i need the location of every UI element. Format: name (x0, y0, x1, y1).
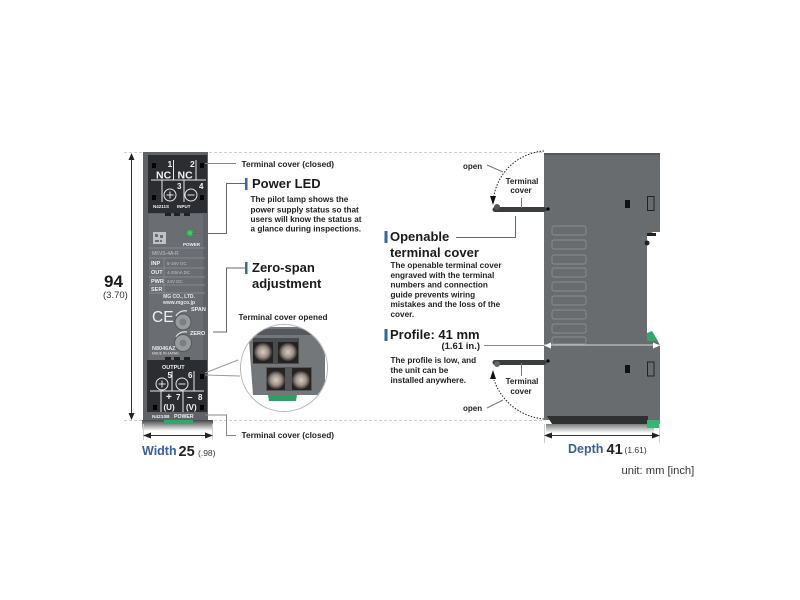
span and zero dials (152, 307, 206, 356)
shadow below front device (142, 420, 213, 431)
profile text: the unit can be (390, 366, 449, 375)
upper terminal cover: INPUT (177, 204, 191, 209)
lower terminal cover: 5 (168, 371, 172, 380)
lower terminal cover: – (187, 392, 193, 403)
lower terminal cover (147, 360, 207, 420)
terminal cover closed top callout: Terminal cover (closed) (242, 159, 334, 169)
lower terminal cover: OUTPUT (162, 365, 185, 371)
rating label: MG CO., LTD. (163, 294, 196, 300)
green clips (647, 331, 658, 341)
upper terminal cover: NC (156, 170, 172, 182)
height dimension: 94 (104, 272, 123, 291)
width dimension: (.98) (198, 448, 216, 458)
upper open cover arm (463, 151, 544, 210)
side latches (625, 196, 656, 376)
openable terminal cover text: cover. (390, 310, 414, 319)
upper terminal cover: 2 (190, 159, 195, 169)
side view device (544, 153, 660, 433)
lower terminal cover: (V) (186, 403, 197, 412)
profile text: (1.61 in.) (441, 341, 480, 352)
zero-span adjustment callout: Zero-span (252, 260, 315, 275)
profile text: installed anywhere. (390, 376, 466, 385)
rating label: 24V DC (167, 279, 184, 284)
upper terminal cover: 1 (168, 159, 172, 169)
depth dimension (544, 424, 660, 458)
terminal cover opened inset: Terminal cover opened (238, 313, 328, 322)
lower terminal cover: 7 (176, 393, 181, 402)
depth dimension: Depth (568, 442, 603, 456)
power LED (183, 228, 201, 247)
rating label: 5-16V DC (167, 261, 188, 266)
upper open cover arm: Terminal (506, 177, 538, 186)
width dimension: Width (142, 444, 177, 458)
side body (544, 153, 660, 420)
openable terminal cover text: numbers and connection (390, 280, 488, 290)
lower terminal cover: 8 (198, 393, 203, 402)
rating label: 4-20mA DC (167, 270, 191, 275)
power LED callout: power supply status so that (250, 206, 359, 214)
depth dimension: (1.61) (624, 445, 647, 455)
terminal cover closed bottom callout: Terminal cover (closed) (242, 430, 334, 440)
dashed extension lines (124, 152, 544, 420)
width dimension: 25 (178, 444, 195, 460)
upper terminal cover (148, 155, 207, 213)
lower terminal cover: (U) (164, 403, 175, 412)
rating label: OUT (151, 270, 163, 276)
openable terminal cover text: guide prevents wiring (390, 290, 475, 300)
profile text: Profile: 41 mm (390, 327, 480, 342)
rating label: M6VS-4A-R (152, 251, 179, 257)
zero-span adjustment callout (213, 260, 322, 332)
lower terminal cover: 6 (188, 371, 193, 380)
lower terminal cover: N4210B (152, 414, 170, 420)
power LED callout: users will know the status at (250, 215, 362, 224)
rating label: SER (151, 287, 162, 293)
upper open cover arm: cover (510, 186, 532, 195)
rating label: INP (151, 261, 160, 267)
shadow below side device (546, 424, 654, 433)
upper terminal cover: 3 (177, 182, 182, 191)
openable terminal cover text: mistakes and the loss of the (390, 300, 501, 309)
upper open cover arm: open (463, 162, 482, 171)
CE mark: CE (152, 309, 174, 326)
power LED: POWER (183, 242, 201, 247)
lower terminal cover: + (166, 392, 172, 403)
span and zero dials: N8046AZ (152, 346, 176, 352)
upper terminal cover: NC (178, 170, 193, 182)
terminal cover closed bottom callout (205, 415, 334, 440)
power LED callout: a glance during inspections. (250, 224, 361, 234)
profile text: The profile is low, and (390, 356, 476, 365)
terminal cover opened inset (205, 313, 328, 412)
height dimension: (3.70) (103, 290, 128, 301)
green clip (164, 420, 193, 424)
power LED callout: Power LED (252, 176, 321, 191)
openable terminal cover text: terminal cover (390, 245, 479, 260)
vent slots (552, 226, 586, 344)
width dimension (142, 424, 216, 460)
openable terminal cover text (384, 216, 516, 319)
rating label: PWR (151, 279, 164, 285)
lower open cover arm: open (463, 404, 482, 413)
depth dimension: 41 (606, 442, 623, 458)
lower open cover arm (463, 361, 544, 419)
span and zero dials: MADE IN JAPAN (152, 352, 179, 356)
power LED callout: The pilot lamp shows the (250, 195, 349, 204)
openable terminal cover text: Openable (390, 229, 449, 244)
front body (143, 152, 208, 420)
power LED callout (192, 176, 362, 234)
rating label (149, 248, 205, 306)
upper terminal cover: 4 (199, 182, 204, 191)
front view device (142, 152, 213, 431)
rating label: www.mgco.jp (162, 300, 195, 306)
height dimension (103, 153, 134, 420)
lower open cover arm: cover (510, 387, 532, 396)
openable terminal cover text: The openable terminal cover (390, 261, 502, 270)
QR code (153, 232, 166, 244)
lower open cover arm: Terminal (506, 377, 538, 386)
zero-span adjustment callout: adjustment (252, 276, 322, 291)
profile text (384, 327, 660, 385)
openable terminal cover text: engraved with the terminal (390, 271, 494, 280)
unit note: unit: mm [inch] (622, 465, 694, 477)
span and zero dials: SPAN (191, 307, 206, 313)
lower terminal cover: POWER (174, 414, 194, 420)
upper terminal cover: N4211S (153, 204, 169, 209)
span and zero dials: ZERO (190, 331, 206, 337)
